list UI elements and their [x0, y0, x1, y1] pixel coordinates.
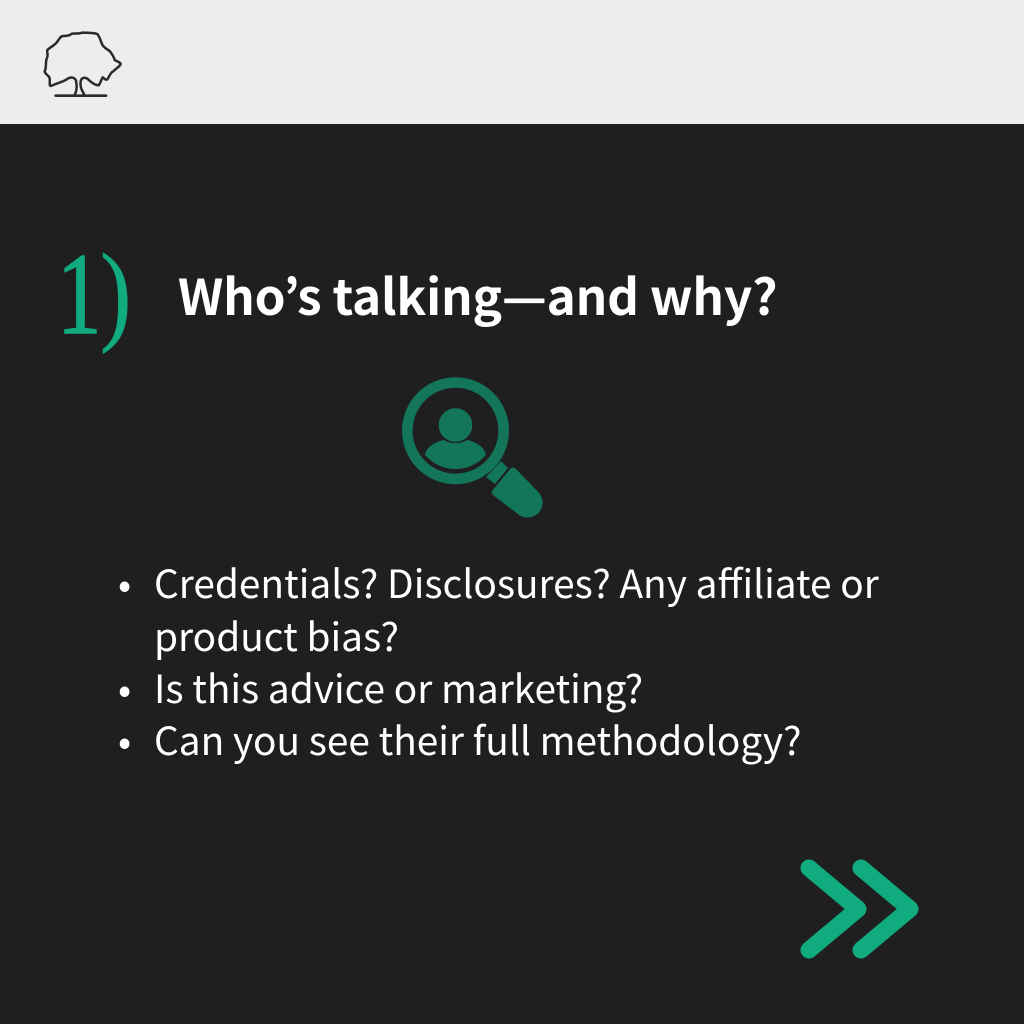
bullet item 1 [118, 554, 879, 662]
icon: tree logo [43, 31, 122, 97]
bullet item 3: Can you see their full methodology? [154, 711, 801, 767]
bullet item 2: Is this advice or marketing? [154, 659, 643, 715]
bullet item 1: • [118, 554, 131, 610]
bullet list [118, 554, 879, 767]
icon: magnifying glass with person [402, 377, 543, 518]
bullet item 2: • [118, 659, 131, 715]
bullet item 3: • [118, 711, 131, 767]
numeral one: 1 [57, 230, 101, 359]
bullet item 1: Credentials? Disclosures? Any affiliate or [154, 554, 879, 610]
bullet item 1: product bias? [154, 606, 399, 662]
closing parenthesis: ) [100, 232, 131, 355]
number marker [57, 230, 131, 359]
heading: Who’s talking—and why? [178, 259, 777, 330]
header band [0, 0, 1024, 124]
icon: double chevron arrow [800, 860, 918, 958]
